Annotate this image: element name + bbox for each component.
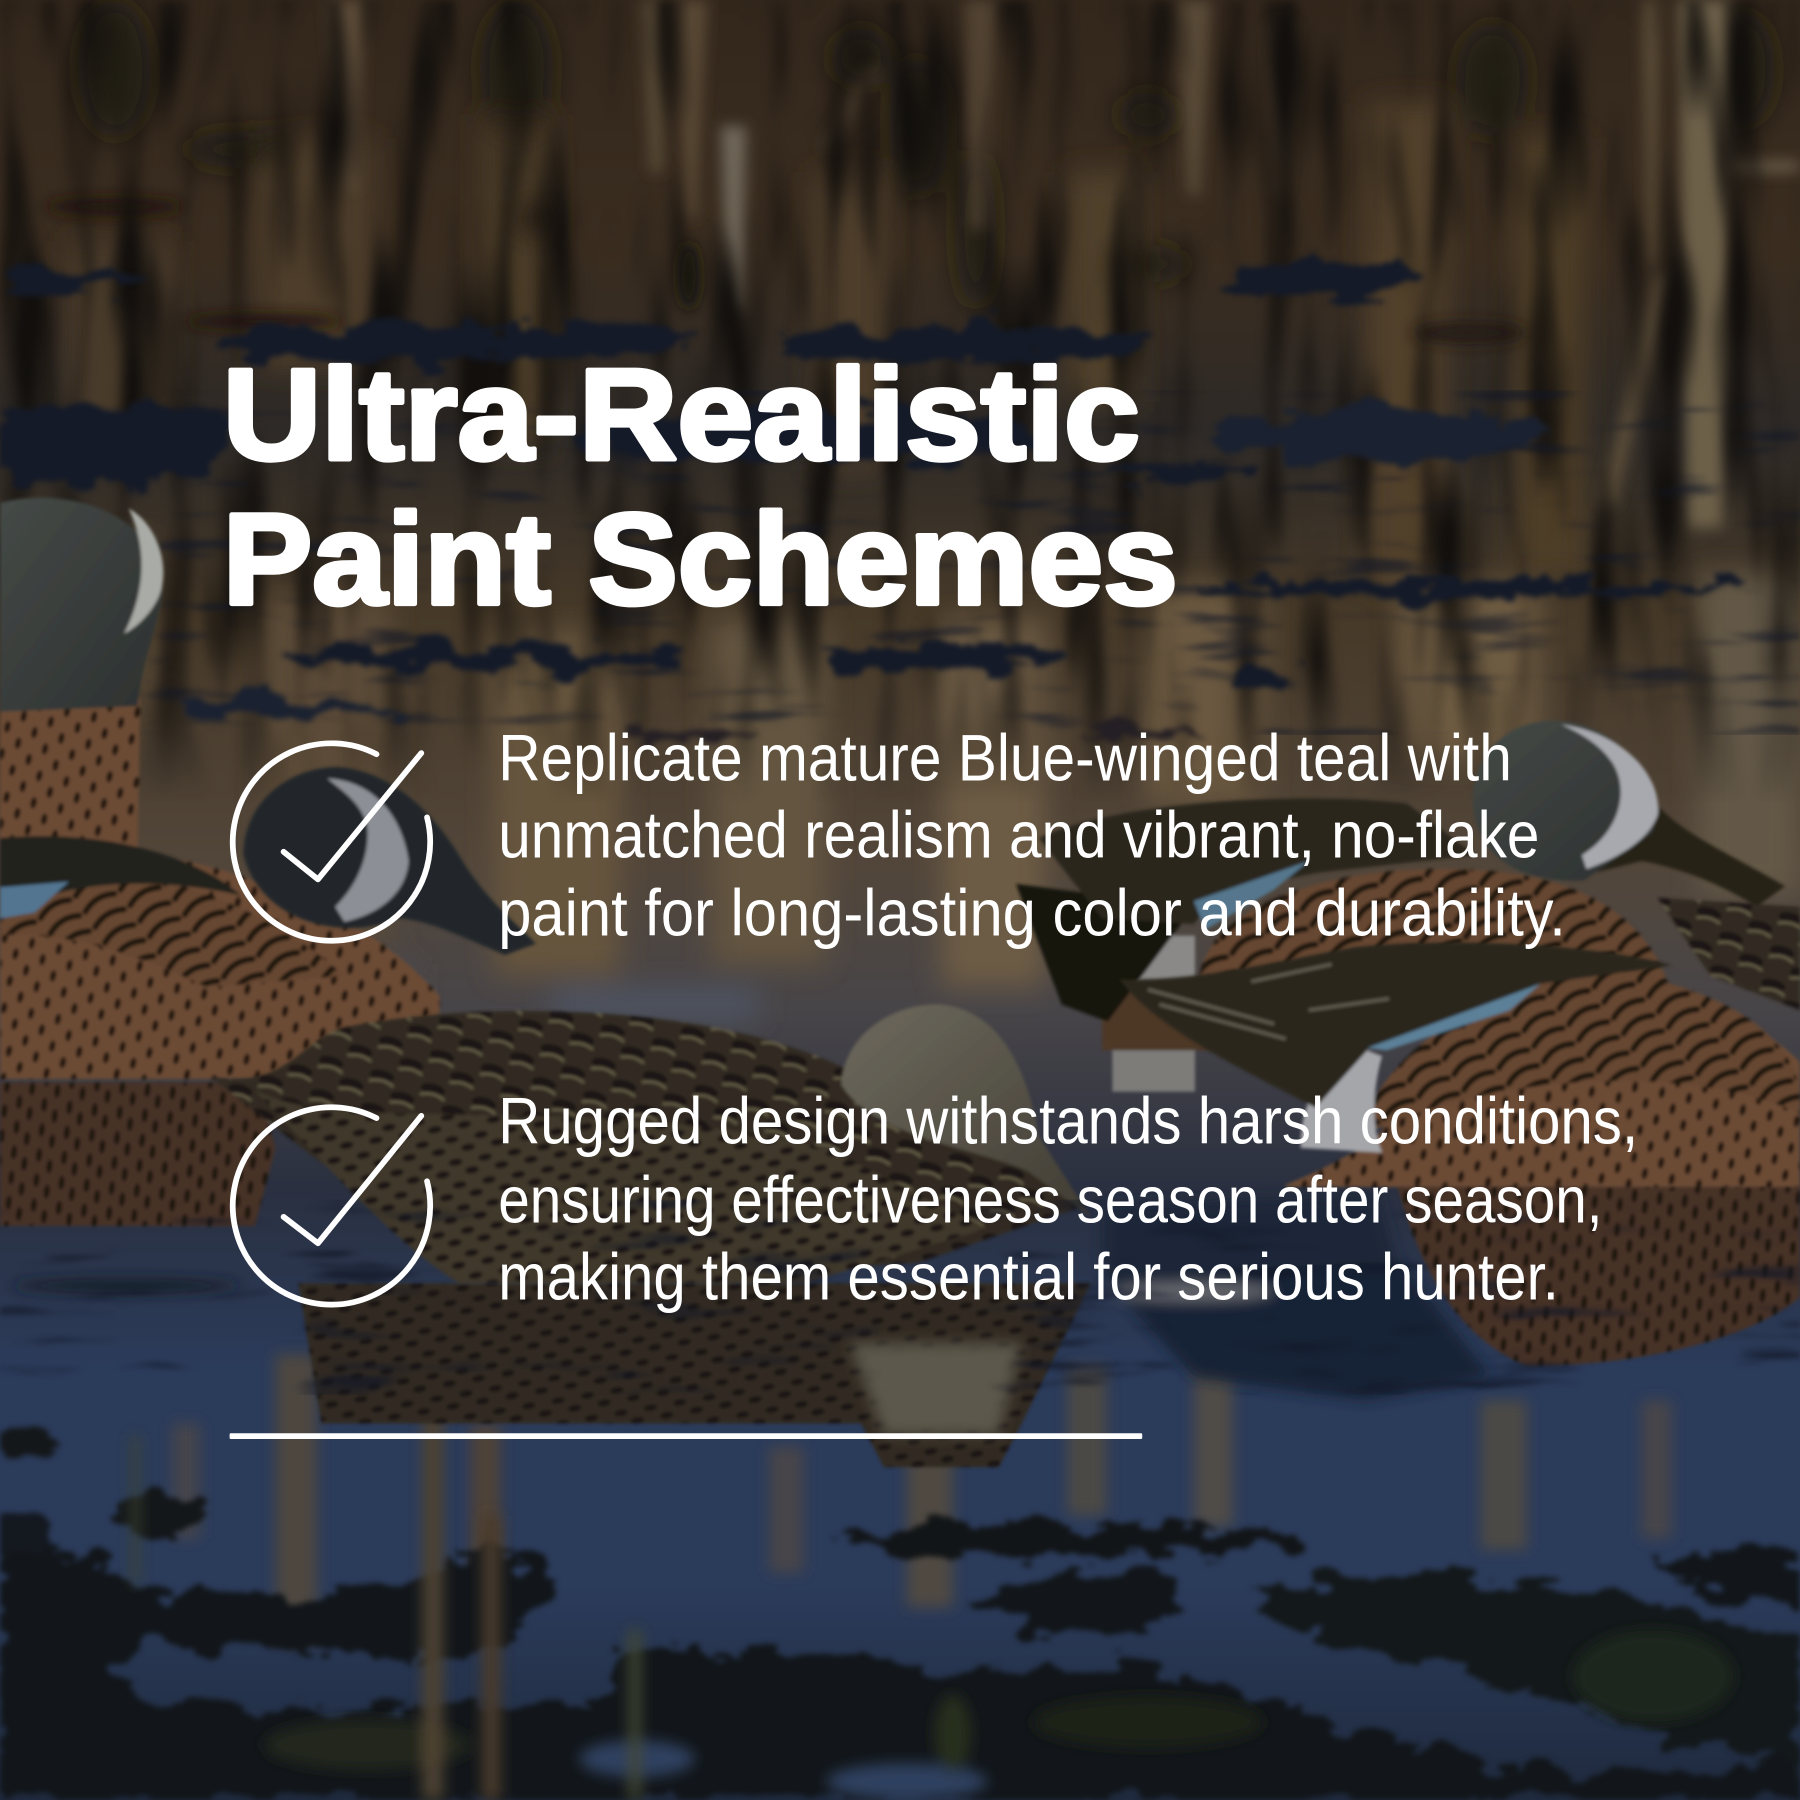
feature 2 — [233, 1084, 1638, 1313]
pale reflection stripes in blue water — [172, 1343, 1671, 1642]
text: feature 1 description: paint for long-lasting color and durability. — [498, 877, 1566, 950]
left decoy — [0, 498, 440, 1079]
lower water ripple texture — [0, 1200, 1800, 1395]
icon: circled check 2 — [233, 1107, 430, 1305]
decoy reflections in water — [0, 1083, 1800, 1467]
text: feature 2 description: Rugged design withstands harsh conditions, — [498, 1084, 1638, 1157]
text: feature 1 description: unmatched realism and vibrant, no-flake — [498, 799, 1539, 872]
title — [223, 343, 1178, 632]
front-right decoy — [1119, 942, 1800, 1187]
text: feature 1 description: Replicate mature Blue-winged teal with — [498, 722, 1512, 795]
text: feature 2 description: making them essential for serious hunter. — [498, 1240, 1559, 1313]
lower dark vegetation — [0, 1428, 1800, 1800]
centre female decoy — [210, 1004, 1091, 1283]
title: Paint Schemes — [223, 488, 1178, 632]
duck head behind first check icon — [243, 767, 536, 955]
pale water patches and bottom reeds — [132, 1299, 1733, 1800]
feature 1 — [233, 722, 1566, 950]
title: Ultra-Realistic — [223, 343, 1140, 487]
reeds and vertical water reflections — [69, 0, 1800, 1045]
divider line — [230, 1433, 1142, 1439]
text: feature 2 description: ensuring effectiveness season after season, — [498, 1164, 1603, 1237]
text: feature 2 description — [498, 1084, 1638, 1313]
generated reed and water textures — [0, 0, 1800, 804]
dark ripples on upper water — [0, 266, 1739, 742]
icon: circled check 1 — [233, 743, 430, 941]
text: feature 1 description — [498, 722, 1566, 950]
back-right decoy — [1016, 721, 1800, 1092]
dark blotches among reeds — [78, 0, 1775, 310]
